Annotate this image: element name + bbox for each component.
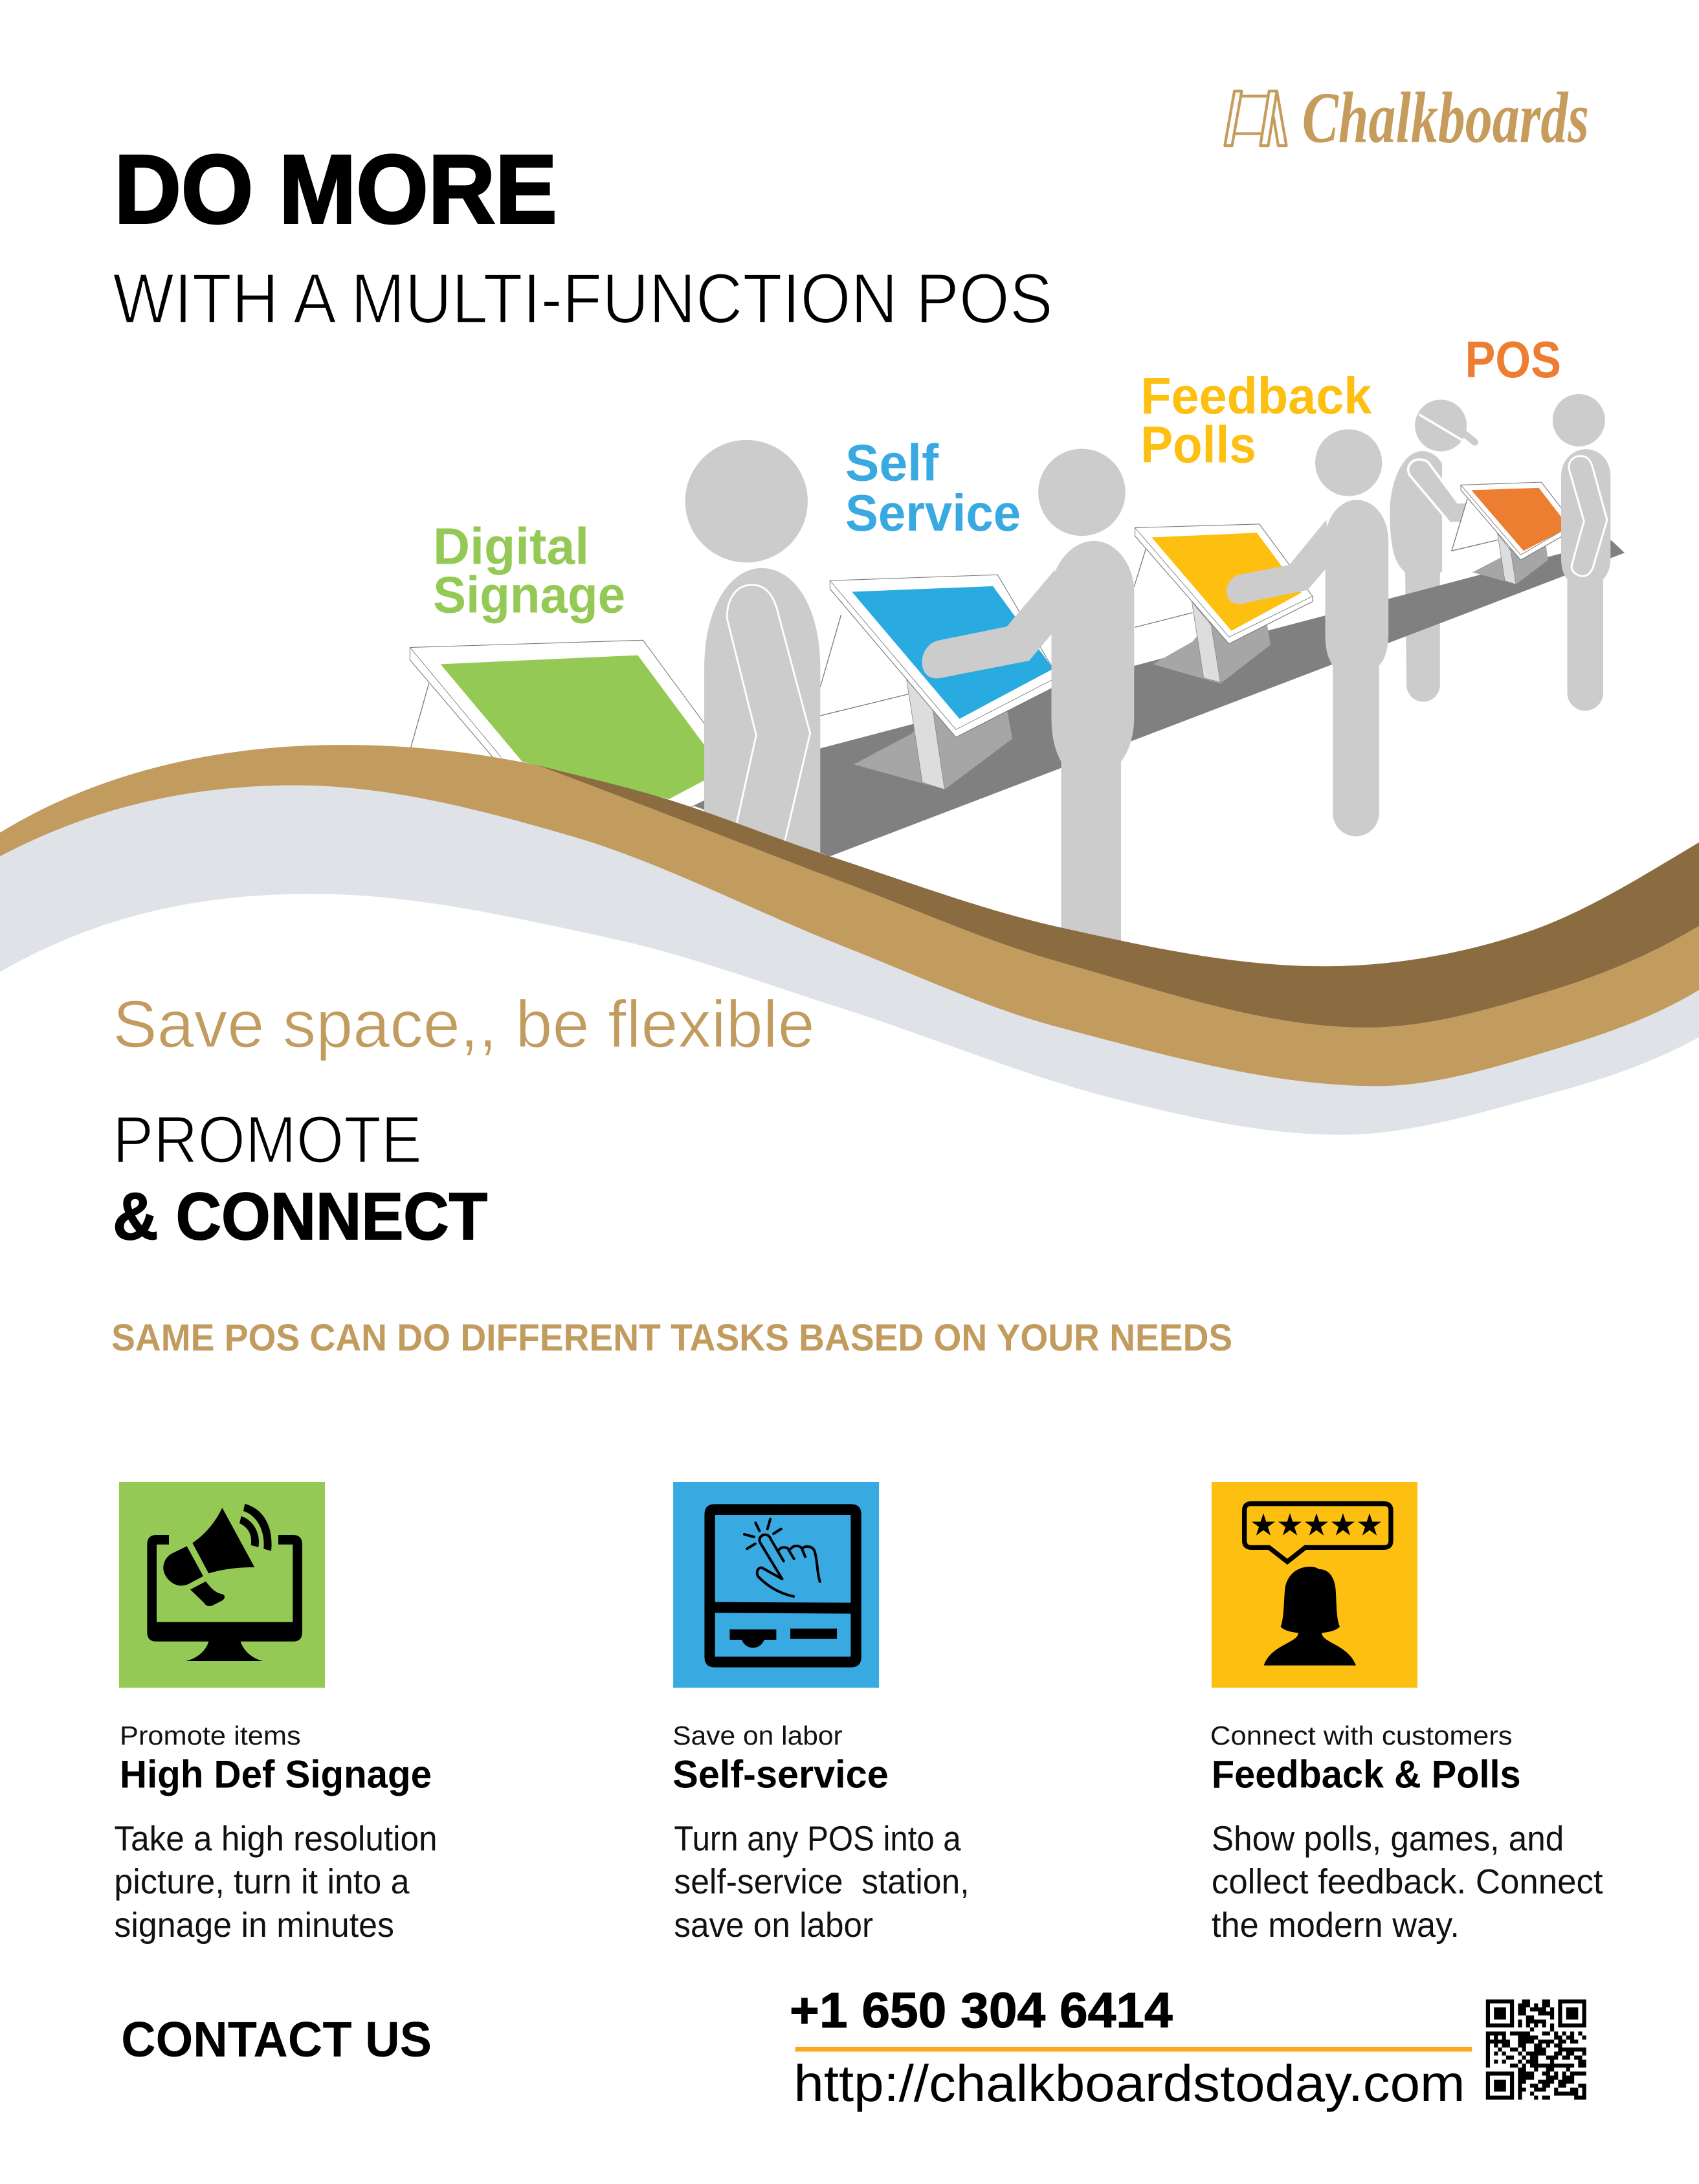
description: collect feedback. Connect <box>1212 1862 1603 1901</box>
heading: promote and connect <box>113 1103 487 1253</box>
item title: Self-service <box>672 1752 889 1796</box>
label: digital signage: Signage <box>433 566 625 624</box>
person: cashier <box>1390 400 1475 701</box>
wave: dark brown band <box>538 766 1699 1028</box>
title: do more: DO MORE <box>114 135 557 243</box>
wave: tan band <box>0 745 1699 1086</box>
item title: Feedback & Polls <box>1212 1752 1521 1796</box>
description: Turn any POS into a <box>674 1820 961 1859</box>
person: feedback customer <box>1227 429 1388 836</box>
contact details <box>790 1983 1472 2112</box>
description: self-service station, <box>674 1862 970 1901</box>
logo wordmark: Chalkboards <box>1302 78 1589 158</box>
description: picture, turn it into a <box>114 1862 410 1901</box>
icon: monitor with megaphone <box>119 1482 325 1688</box>
tagline: Save space,, be flexible <box>113 987 815 1061</box>
label: feedback polls: Feedback <box>1140 367 1372 425</box>
subheading: SAME POS CAN DO DIFFERENT TASKS BASED ON YOUR NEEDS <box>111 1317 1232 1359</box>
person: digital signage customer <box>685 440 820 891</box>
station: feedback and polls <box>1134 524 1313 683</box>
contact us heading: CONTACT US <box>121 2012 432 2068</box>
description: the modern way. <box>1212 1906 1460 1945</box>
person: self service customer <box>922 448 1134 975</box>
description <box>674 1820 970 1945</box>
caption: Connect with customers <box>1210 1721 1513 1750</box>
label: feedback polls: Polls <box>1140 415 1256 473</box>
website: http://chalkboardstoday.com <box>794 2055 1465 2112</box>
panel: high def signage <box>114 1482 438 1945</box>
item title: High Def Signage <box>120 1752 432 1796</box>
station: digital signage <box>410 640 705 821</box>
person: POS customer <box>1553 394 1610 711</box>
wave bands <box>0 745 1699 1135</box>
caption: Promote items <box>120 1721 301 1750</box>
description <box>114 1820 438 1945</box>
label: self service: Service <box>845 484 1021 542</box>
title <box>113 135 1053 338</box>
counter floor <box>691 540 1625 856</box>
description: Take a high resolution <box>114 1820 438 1859</box>
icon: customer with star rating <box>1212 1482 1417 1688</box>
illustration: POS stations and people <box>410 331 1625 975</box>
heading: promote and connect: & CONNECT <box>113 1179 487 1253</box>
icon: kiosk with touching hand <box>673 1482 879 1688</box>
label: digital signage <box>433 517 625 624</box>
station: POS <box>1452 482 1562 584</box>
station: self service <box>820 575 1053 789</box>
description: signage in minutes <box>114 1906 394 1945</box>
QR code <box>1486 2002 1586 2098</box>
panel: feedback and polls <box>1210 1482 1603 1945</box>
heading: promote and connect: PROMOTE <box>113 1103 422 1177</box>
label: POS: POS <box>1465 331 1561 388</box>
description <box>1212 1820 1603 1945</box>
wave: light gray band <box>0 766 1699 1135</box>
brand logo <box>1225 78 1589 158</box>
label: digital signage: Digital <box>433 517 589 575</box>
description: Show polls, games, and <box>1212 1820 1564 1859</box>
panel: self-service <box>672 1482 970 1945</box>
subtitle: WITH A MULTI-FUNCTION POS <box>113 259 1053 338</box>
label: feedback polls <box>1140 367 1372 473</box>
phone number: +1 650 304 6414 <box>790 1983 1173 2038</box>
description: save on labor <box>674 1906 873 1945</box>
label: self service <box>845 434 1021 542</box>
caption: Save on labor <box>672 1721 843 1750</box>
icon: chalkboard easel <box>1225 91 1286 146</box>
label: self service: Self <box>845 434 939 491</box>
